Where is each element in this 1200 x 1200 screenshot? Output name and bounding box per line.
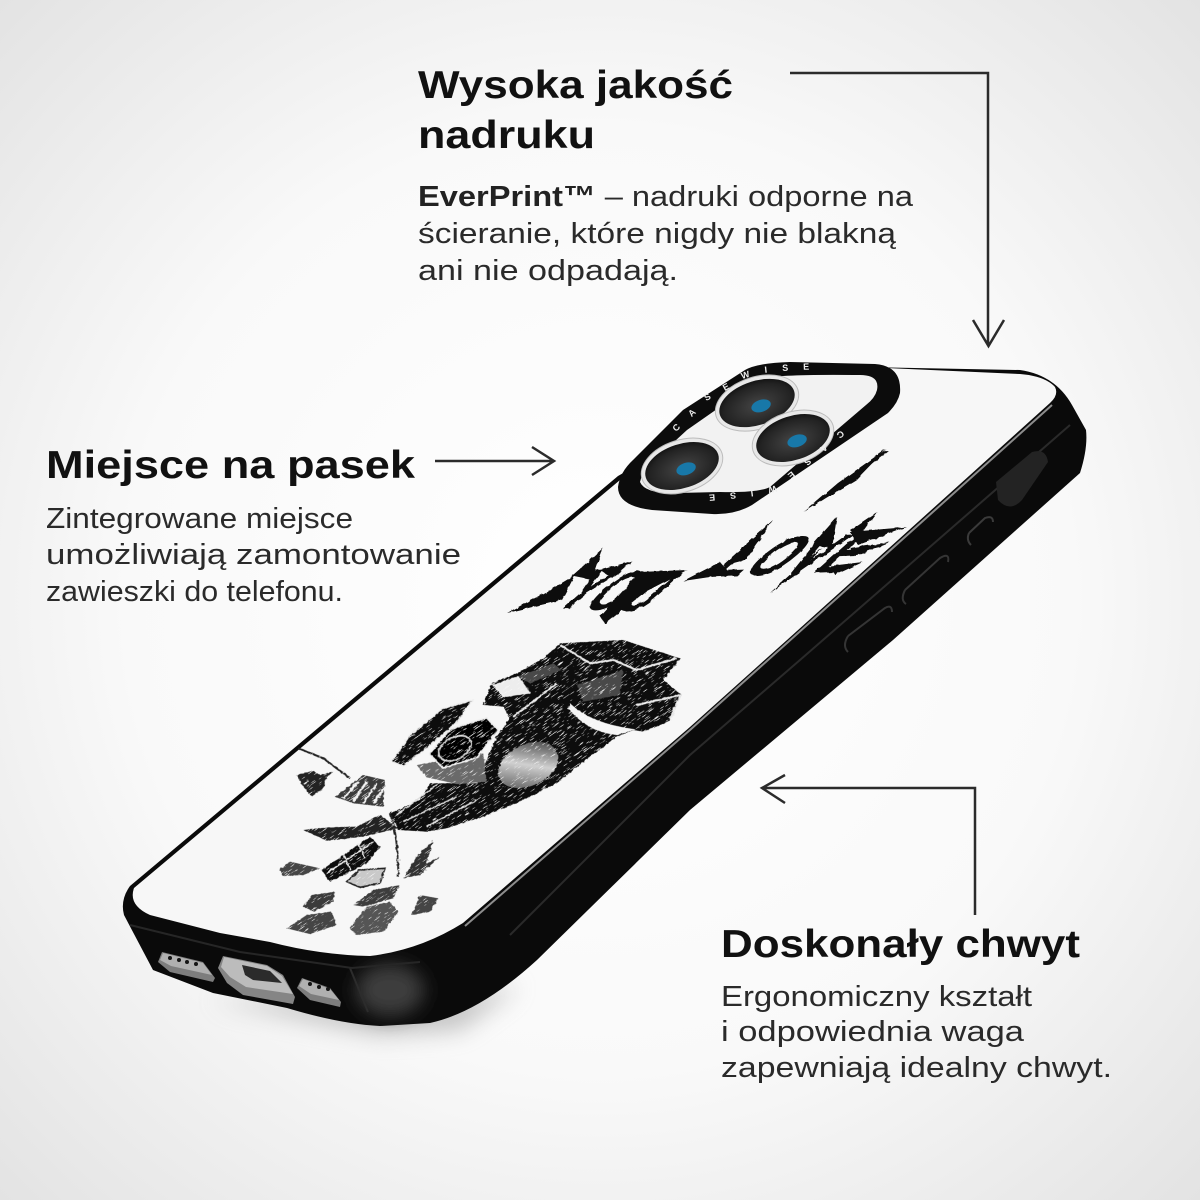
teeth gaps bbox=[343, 782, 385, 803]
speaker holes bbox=[168, 956, 198, 966]
camera ring bbox=[618, 362, 900, 514]
heading: Doskonały chwyt bbox=[721, 923, 1080, 966]
petals bbox=[279, 862, 320, 876]
phone shadow bbox=[210, 985, 520, 1035]
volume down button bbox=[845, 607, 892, 652]
callout: print quality: ścieranie, które nigdy nie blakną bbox=[418, 218, 897, 250]
cheek highlight bbox=[491, 733, 566, 797]
skull bone bbox=[417, 753, 487, 784]
letter I: I bbox=[808, 437, 907, 510]
case back panel bbox=[133, 368, 1056, 956]
arrow bbox=[435, 447, 554, 475]
side edge highlight bbox=[465, 405, 1052, 926]
eye inner ring bbox=[435, 730, 475, 766]
callout: strap mount bbox=[46, 444, 554, 608]
right speaker holes bbox=[308, 982, 330, 991]
rose and cheek mass bbox=[390, 640, 682, 832]
leaf veins bbox=[327, 842, 373, 873]
callout: strap mount: umożliwiają zamontowanie bbox=[46, 539, 461, 571]
teeth bbox=[335, 775, 385, 807]
callout: strap mount: zawieszki do telefonu. bbox=[46, 576, 343, 608]
LOVE spikes bbox=[683, 512, 907, 593]
I spikes bbox=[804, 449, 886, 512]
right speaker top bbox=[299, 979, 339, 1000]
artwork: skull and rose bbox=[141, 451, 820, 1124]
volume up button bbox=[903, 556, 948, 604]
rose white stripe bbox=[568, 703, 635, 735]
arrow bbox=[762, 775, 975, 915]
heading: Wysoka jakość bbox=[418, 64, 733, 107]
arrow bbox=[790, 73, 1004, 346]
stem bbox=[298, 748, 398, 877]
callout: perfect grip bbox=[721, 775, 1112, 1084]
right speaker bbox=[297, 978, 341, 1007]
ring lettering bottom: CASEWISE bbox=[709, 431, 844, 501]
description: Zintegrowane miejsce bbox=[46, 503, 353, 535]
word LOVE: LOVE bbox=[694, 522, 900, 589]
description: EverPrint™ – nadruki odporne na bbox=[418, 181, 914, 213]
callout: print quality bbox=[418, 64, 1004, 346]
charging port bbox=[218, 956, 295, 1004]
case body bbox=[123, 366, 1086, 1026]
jaw streaks bbox=[397, 785, 477, 827]
heading: Miejsce na pasek bbox=[46, 444, 415, 487]
rose grey petals bbox=[518, 663, 623, 702]
left speaker top bbox=[160, 953, 212, 975]
bottom groove bbox=[130, 925, 420, 968]
callout: perfect grip: i odpowiednia waga bbox=[721, 1016, 1025, 1048]
port opening bbox=[242, 965, 282, 983]
jaw bbox=[303, 815, 398, 841]
phone case bbox=[122, 362, 1086, 1030]
callout: perfect grip: zapewniają idealny chwyt. bbox=[721, 1052, 1112, 1084]
left lens bbox=[634, 428, 730, 504]
power button bbox=[996, 451, 1048, 506]
left speaker bbox=[158, 952, 215, 982]
side groove bbox=[510, 425, 1070, 935]
big leaf bbox=[322, 837, 380, 882]
corner seam bbox=[350, 968, 368, 1012]
callout: print quality: nadruku bbox=[418, 114, 595, 157]
top lens bbox=[708, 365, 806, 441]
camera opening bbox=[640, 375, 877, 493]
charging port top bbox=[221, 957, 293, 994]
description: Ergonomiczny kształt bbox=[721, 981, 1032, 1013]
artwork: I love you bbox=[507, 437, 907, 624]
rose veins bbox=[513, 645, 681, 720]
ring lettering top: CASEWISE bbox=[673, 363, 809, 431]
YOU spikes bbox=[507, 548, 687, 624]
bottom corner sheen bbox=[356, 964, 424, 1016]
mute switch bbox=[968, 517, 993, 545]
right lens bbox=[745, 400, 841, 476]
main eye socket bbox=[429, 718, 498, 768]
thorn sprig bbox=[403, 840, 440, 878]
camera module bbox=[618, 362, 900, 514]
small leaves bbox=[296, 771, 333, 797]
rose upper petal bbox=[493, 676, 531, 697]
word YOU: YOU bbox=[538, 558, 698, 624]
second eye socket bbox=[392, 700, 473, 766]
callout: print quality: ani nie odpadają. bbox=[418, 255, 678, 287]
